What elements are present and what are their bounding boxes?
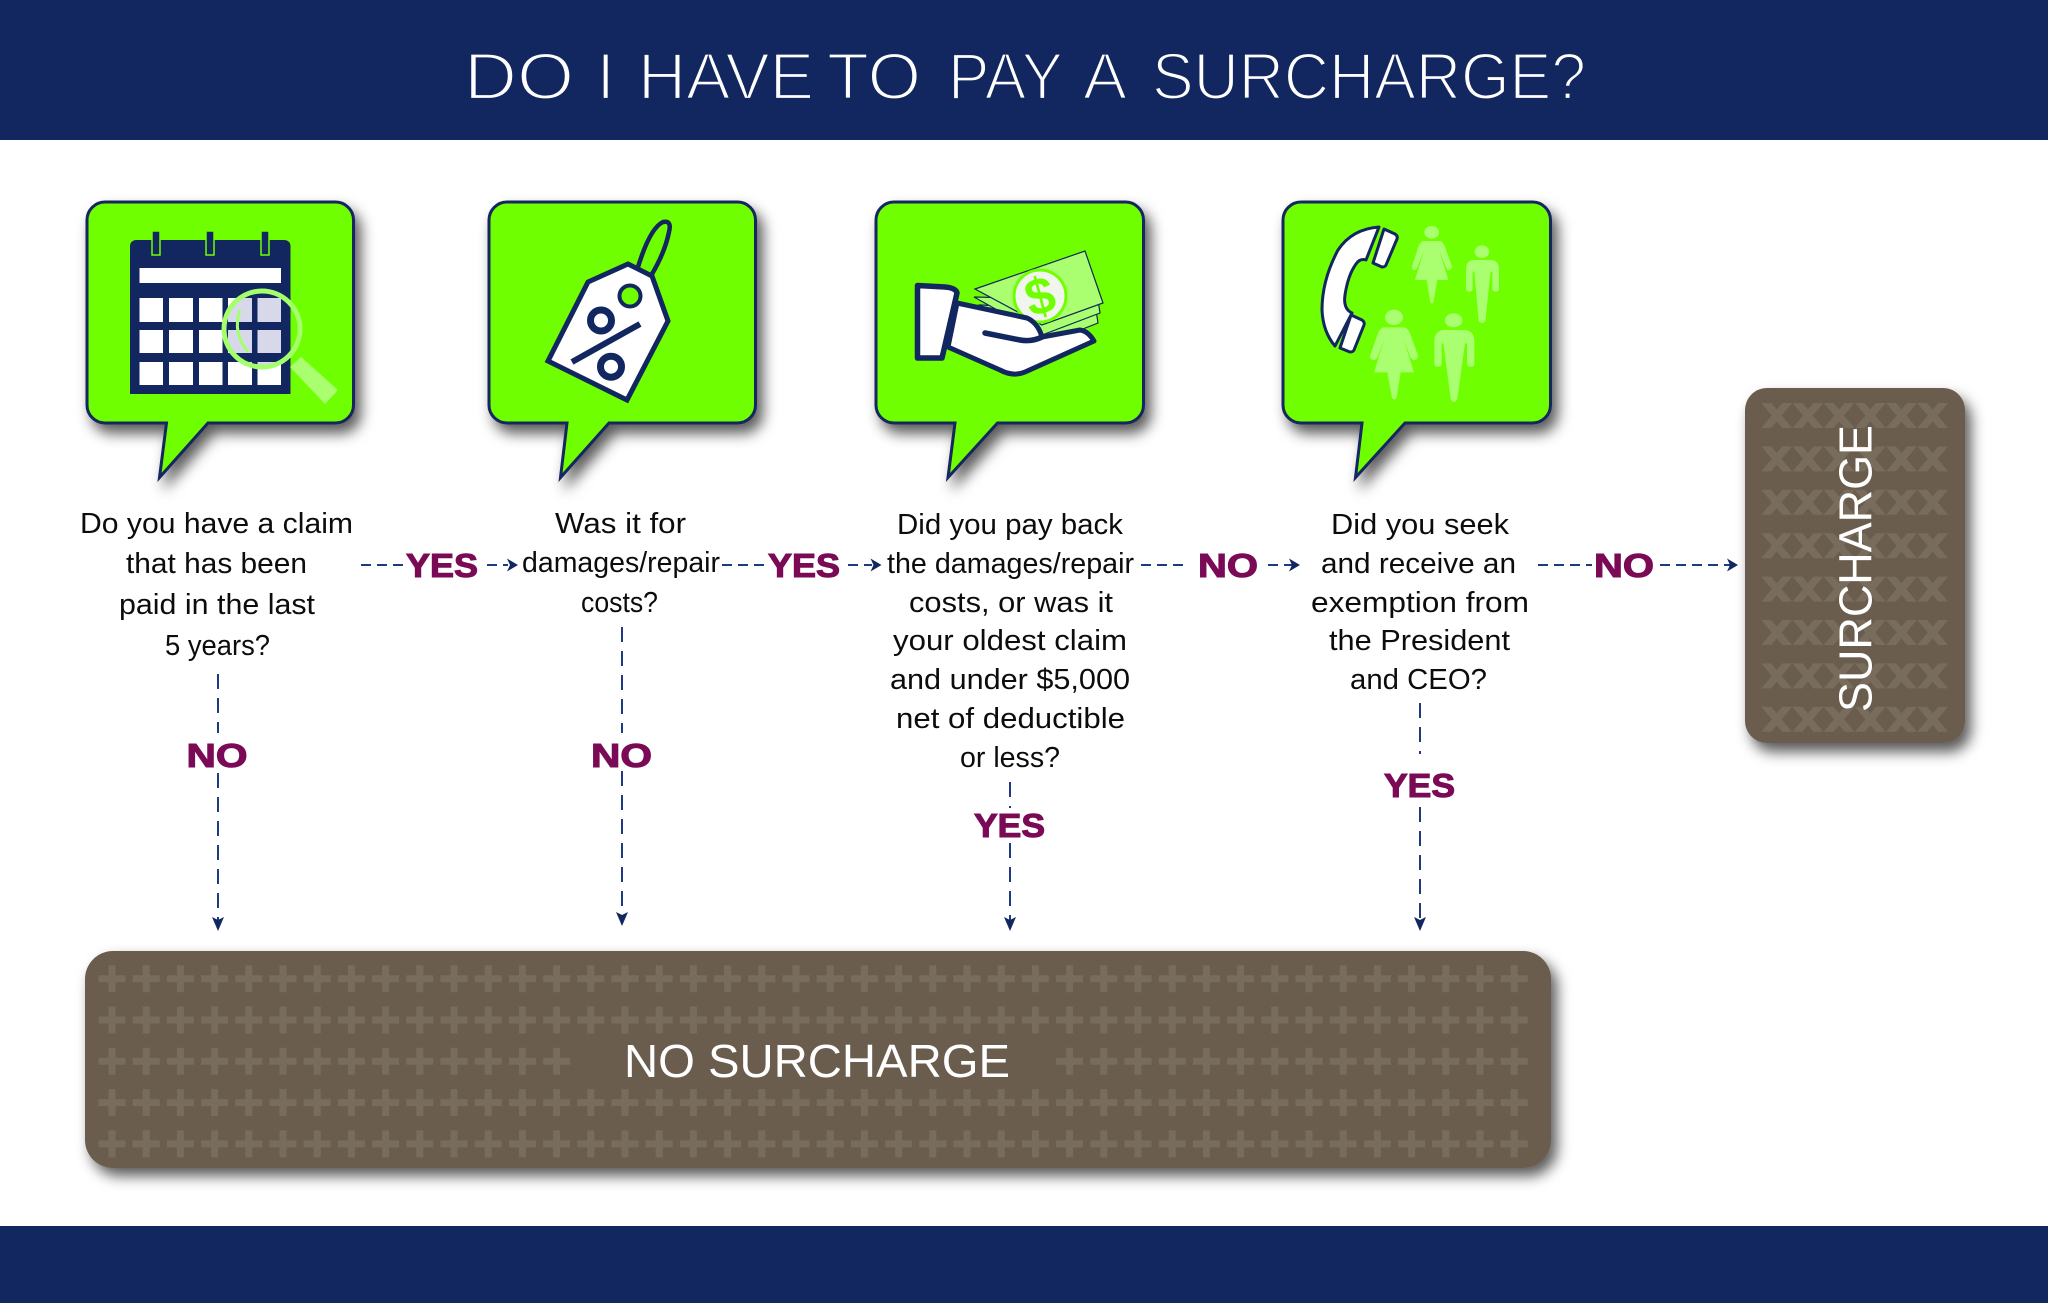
text: question 2: [522, 508, 720, 619]
text: question 4: the President: [1329, 625, 1510, 657]
text: question 2: costs?: [581, 587, 658, 619]
text: question 3: or less?: [960, 742, 1060, 774]
arrow: question 3 to question 4: [1141, 558, 1300, 572]
speech bubble 1: [87, 202, 354, 478]
text: question 4: Did you seek: [1331, 509, 1510, 541]
heading: no surcharge: NO SURCHARGE: [624, 1035, 1010, 1087]
label: NO 1: NO: [186, 737, 248, 774]
text: question 4: [1311, 509, 1529, 696]
label: NO 2: NO: [591, 737, 652, 774]
panel: question 4 bubble with phone and people icon: [1283, 202, 1550, 478]
title: SURCHARGE?: [1152, 39, 1586, 113]
label: YES 4: YES: [1384, 767, 1455, 804]
text: question 4: and receive an: [1321, 548, 1516, 580]
label: YES 2: YES: [768, 547, 840, 584]
label: NO 4: NO: [1594, 547, 1654, 584]
text: question 1: that has been: [126, 548, 307, 580]
title: A: [1083, 39, 1127, 113]
arrow: question 2 to question 3: [722, 558, 882, 572]
panel: surcharge: [1745, 388, 1965, 743]
arrow: question 2 down to no surcharge: [616, 627, 628, 926]
title: TO: [827, 39, 921, 113]
arrow: question 4 down to no surcharge: [1414, 703, 1426, 931]
text: question 3: your oldest claim: [893, 625, 1127, 657]
icon: telephone handset: [1322, 227, 1397, 352]
text: question 2: damages/repair: [522, 547, 720, 579]
icon: four people: [1370, 226, 1499, 402]
text: question 4: exemption from: [1311, 587, 1529, 619]
icon: percent price tag: [548, 222, 670, 400]
arrow: question 1 down to no surcharge: [212, 674, 224, 931]
title: PAY: [948, 39, 1063, 113]
text: question 3: the damages/repair: [887, 548, 1134, 580]
arrow: question 3 down to no surcharge: [1004, 782, 1016, 931]
text: question 1: paid in the last: [119, 589, 315, 621]
header band: [0, 0, 2048, 140]
text: question 1: [80, 508, 353, 662]
panel: no surcharge: [85, 951, 1551, 1168]
title: [464, 39, 1586, 113]
heading: surcharge: SURCHARGE: [1830, 425, 1882, 712]
arrow: question 1 to question 2: [361, 558, 518, 572]
speech bubble 4: [1283, 202, 1550, 478]
icon: hand holding money: $: [1019, 265, 1062, 329]
text: question 3: costs, or was it: [909, 587, 1113, 619]
icon: hand holding money: [918, 251, 1103, 374]
speech bubble 3: [876, 202, 1144, 478]
speech bubble 2: [489, 202, 756, 478]
footer band: [0, 1226, 2048, 1303]
label: YES 1: YES: [406, 547, 478, 584]
icon: calendar with magnifier: [130, 231, 338, 404]
title: I: [596, 39, 615, 113]
title: DO: [464, 39, 574, 113]
text: question 2: Was it for: [555, 508, 686, 540]
panel: question 1 bubble with calendar icon: [87, 202, 354, 478]
text: question 1: 5 years?: [165, 630, 270, 662]
text: question 4: and CEO?: [1350, 664, 1487, 696]
text: question 3: net of deductible: [896, 703, 1125, 735]
panel: question 2 bubble with price tag icon: [489, 202, 756, 478]
panel: question 3 bubble with money in hand icon: [876, 202, 1144, 478]
label: YES 3: YES: [974, 807, 1045, 844]
text: question 3: and under $5,000: [890, 664, 1130, 696]
label: NO 3: NO: [1198, 547, 1258, 584]
text: question 3: [887, 509, 1134, 774]
text: question 1: Do you have a claim: [80, 508, 353, 540]
text: question 3: Did you pay back: [897, 509, 1123, 541]
title: HAVE: [638, 39, 814, 113]
arrow: question 4 to surcharge: [1538, 558, 1738, 572]
